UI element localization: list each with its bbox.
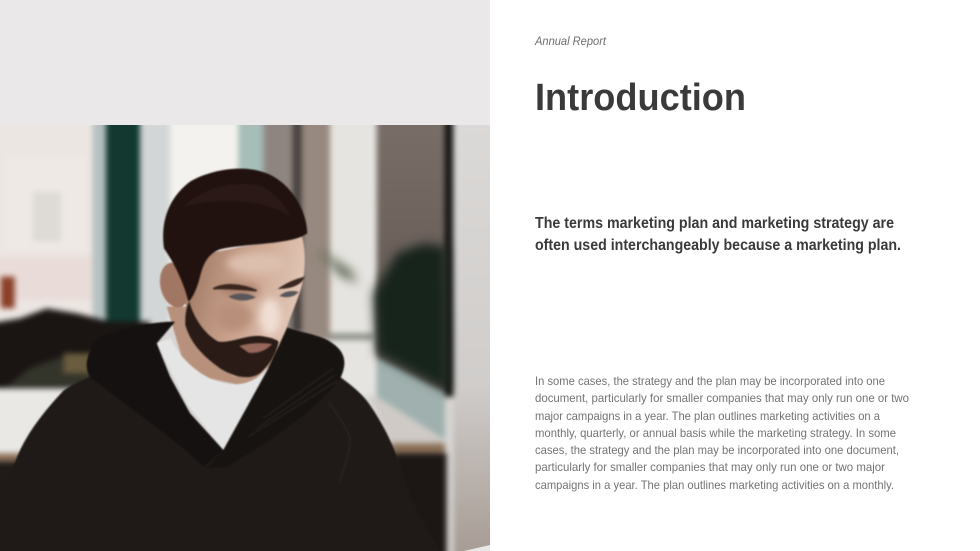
face	[185, 235, 305, 377]
white table	[0, 386, 67, 454]
hair	[163, 169, 307, 302]
man: hoodie, t-shirt, head	[14, 236, 398, 551]
t-shirt	[157, 338, 268, 450]
subheading	[535, 215, 901, 254]
body paragraph: particularly for smaller companies that may only run one or two major	[535, 460, 885, 474]
body paragraph	[535, 374, 909, 492]
panel: photo of man in black hoodie	[0, 100, 513, 551]
photo background: blurred window and interior	[0, 100, 513, 551]
subheading: The terms marketing plan and marketing strategy are	[535, 215, 894, 232]
beard	[185, 302, 279, 377]
body paragraph: major campaigns in a year. The plan outlines marketing activities on a	[535, 409, 880, 423]
right sill and table	[377, 357, 445, 440]
eyebrows	[213, 285, 257, 291]
body paragraph: In some cases, the strategy and the plan may be incorporated into one	[535, 374, 885, 388]
man: face shading	[215, 253, 287, 335]
label: Annual Report: Annual Report	[534, 34, 607, 48]
eyes	[228, 293, 256, 301]
title: Introduction: Introduction	[535, 77, 746, 119]
neck	[167, 307, 283, 387]
subheading: often used interchangeably because a marketing plan.	[535, 237, 901, 254]
body paragraph: campaigns in a year. The plan outlines marketing activities on a monthly.	[535, 478, 894, 492]
man: facial features and hair	[163, 169, 307, 377]
body paragraph: document, particularly for smaller companies that may only run one or two	[535, 391, 909, 405]
white corner of laptop	[464, 545, 490, 551]
ear	[159, 262, 188, 308]
dark plants on left sill	[0, 308, 150, 388]
hood shadow	[87, 322, 223, 467]
photo background: blurred plant	[317, 243, 448, 392]
panel: grey block above photo	[0, 0, 490, 125]
body paragraph: cases, the strategy and the plan may be incorporated into one document,	[535, 443, 899, 457]
body paragraph: monthly, quarterly, or annual basis while the marketing strategy. In some	[535, 426, 896, 440]
hoodie body	[14, 321, 398, 551]
